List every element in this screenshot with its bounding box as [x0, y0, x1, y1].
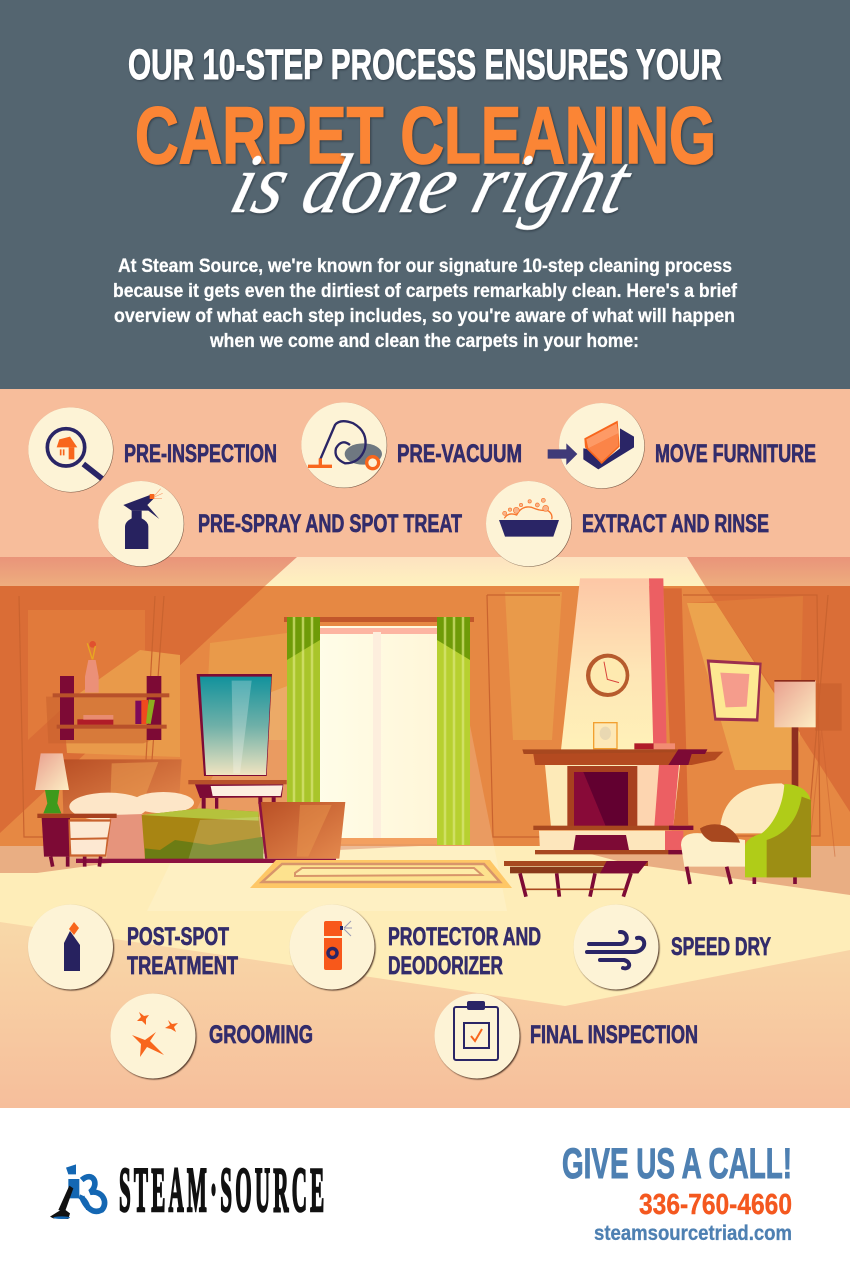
website: steamsourcetriad.com	[594, 1222, 792, 1245]
wall picture	[707, 659, 762, 722]
intro paragraph	[113, 256, 738, 352]
icon: protector can	[290, 904, 374, 990]
intro paragraph: when we come and clean the carpets in your home:	[209, 331, 639, 352]
arrow to move furniture	[548, 443, 577, 465]
label post-spot treatment: TREATMENT	[127, 952, 238, 980]
room illustration background	[0, 389, 850, 1108]
label pre-inspection: PRE-INSPECTION	[124, 440, 277, 468]
label grooming: GROOMING	[209, 1021, 313, 1049]
label protector and deodorizer: PROTECTOR AND	[388, 923, 541, 951]
photo frame and books on mantel	[594, 723, 675, 749]
icon: pre-spray bottle	[98, 481, 184, 566]
label final inspection: FINAL INSPECTION	[530, 1021, 698, 1049]
fireplace body	[522, 749, 723, 854]
label pre-spray and spot treat: PRE-SPRAY AND SPOT TREAT	[198, 510, 462, 538]
phone number: 336-760-4660	[639, 1189, 792, 1221]
footer background	[0, 1108, 850, 1276]
icon: speed dry wind	[574, 904, 658, 990]
label speed dry: SPEED DRY	[671, 933, 771, 961]
wall clock	[586, 654, 629, 697]
title script: is done right: is done right	[221, 138, 642, 231]
logo wordmark: STEAM·SOURCE	[119, 1156, 324, 1226]
mirror and vanity	[188, 674, 287, 809]
icon: final inspection clipboard	[434, 994, 520, 1078]
chimney	[561, 578, 688, 825]
rug	[250, 860, 512, 888]
label post-spot treatment	[127, 923, 238, 980]
icon: pre-inspection magnifier	[28, 407, 113, 492]
wall shelves	[46, 641, 169, 743]
bed	[62, 759, 345, 863]
intro paragraph: because it gets even the dirtiest of carpets remarkably clean. Here's a brief	[113, 281, 738, 302]
icon: pre-vacuum	[301, 402, 387, 488]
label post-spot treatment: POST-SPOT	[127, 923, 229, 951]
coffee table	[504, 861, 648, 897]
icon: move furniture sofa	[559, 403, 644, 488]
armchair with throw	[681, 783, 811, 884]
logo icon	[50, 1164, 105, 1219]
icon: grooming sparkles	[110, 994, 196, 1078]
icon row top	[28, 402, 387, 492]
intro paragraph: At Steam Source, we're known for our signature 10-step cleaning process	[118, 256, 732, 277]
label pre-vacuum: PRE-VACUUM	[397, 440, 522, 468]
window with curtains	[284, 617, 474, 845]
icon: extract and rinse tub	[486, 481, 571, 566]
header background	[0, 0, 850, 389]
label protector and deodorizer	[388, 923, 541, 980]
left furniture: shelves, mirror, bed	[35, 641, 345, 867]
label extract and rinse: EXTRACT AND RINSE	[582, 510, 769, 538]
icon: post-spot bottle	[28, 904, 113, 990]
bedside lamp and nightstand	[35, 753, 117, 867]
floor lamp	[774, 680, 842, 857]
intro paragraph: overview of what each step includes, so you're aware of what will happen	[114, 306, 735, 327]
right furniture: fireplace, armchair, lamp	[504, 578, 842, 897]
label protector and deodorizer: DEODORIZER	[388, 952, 503, 980]
